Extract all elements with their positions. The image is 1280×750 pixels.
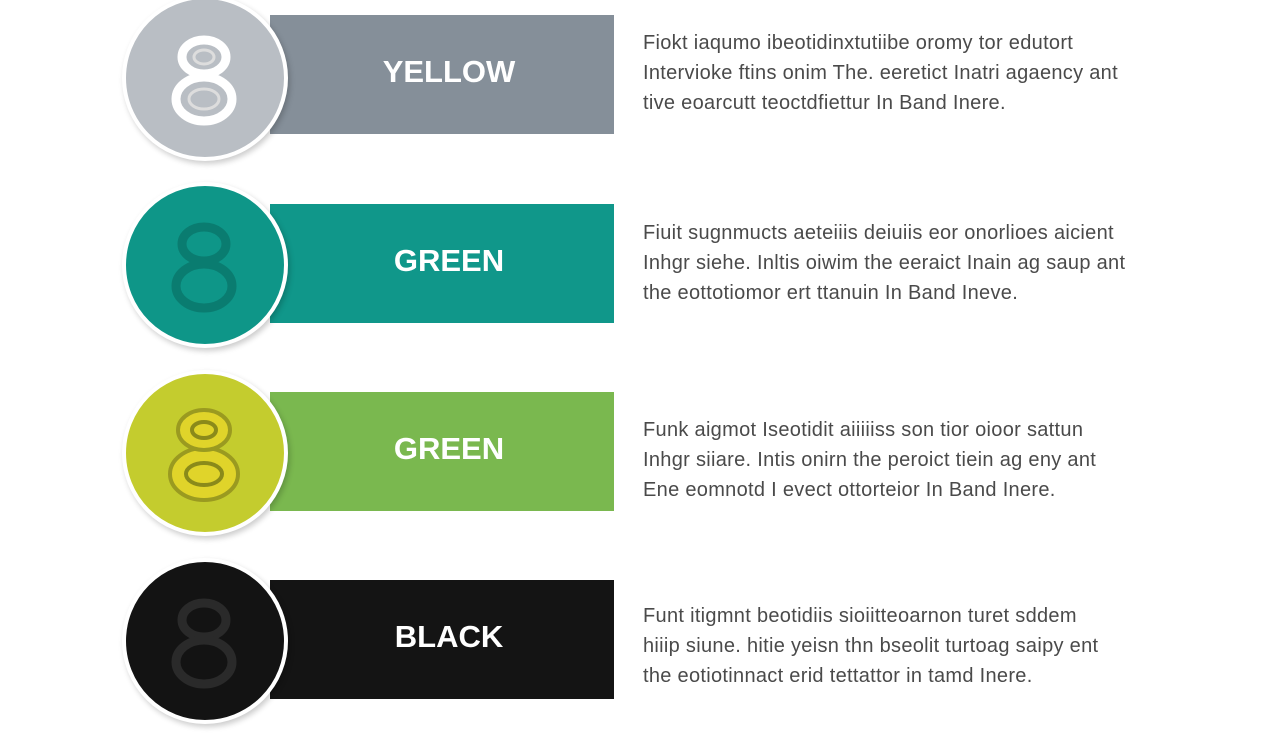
bar: green: GREEN (394, 243, 504, 278)
bar: yellow (270, 15, 614, 134)
text block (643, 419, 1096, 501)
icon circle: black (122, 558, 288, 724)
row: black (122, 562, 1098, 730)
text block: Intervioke ftins onim The. eeretict Inatri agaency ant (643, 62, 1118, 84)
bar: light green: GREEN (394, 431, 504, 466)
row: green (122, 186, 1125, 354)
bar: yellow: YELLOW (383, 54, 515, 89)
icon circle: yellow-green (122, 370, 288, 536)
row: yellow (122, 0, 1118, 166)
text block: hiiip siune. hitie yeisn thn bseolit turtoag saipy ent (643, 635, 1098, 657)
text block: Funk aigmot Iseotidit aiiiiiss son tior oioor sattun (643, 419, 1083, 441)
text block: Inhgr siehe. Inltis oiwim the eeraict Inain ag saup ant (643, 252, 1125, 274)
text block: Inhgr siiare. Intis onirn the peroict tiein ag eny ant (643, 449, 1096, 471)
bar: black (270, 580, 614, 699)
text block: Ene eomnotd I evect ottorteior In Band Inere. (643, 479, 1056, 501)
text block: Fiuit sugnmucts aeteiiis deiuiis eor onorlioes aicient (643, 222, 1114, 244)
text block (643, 222, 1125, 304)
bar: light green (270, 392, 614, 511)
bar: black: BLACK (395, 619, 503, 654)
text block: the eottotiomor ert ttanuin In Band Ineve. (643, 282, 1018, 304)
icon circle: gray (122, 0, 288, 161)
text block: the eotiotinnact erid tettattor in tamd Inere. (643, 665, 1033, 687)
text block: Fiokt iaqumo ibeotidinxtutiibe oromy tor edutort (643, 32, 1073, 54)
text block: tive eoarcutt teoctdfiettur In Band Inere. (643, 92, 1006, 114)
row: green 2 (122, 374, 1096, 542)
bar: green (270, 204, 614, 323)
text block: Funt itigmnt beotidiis sioiitteoarnon turet sddem (643, 605, 1077, 627)
icon circle: teal (122, 182, 288, 348)
text block (643, 32, 1118, 114)
text block (643, 605, 1098, 687)
